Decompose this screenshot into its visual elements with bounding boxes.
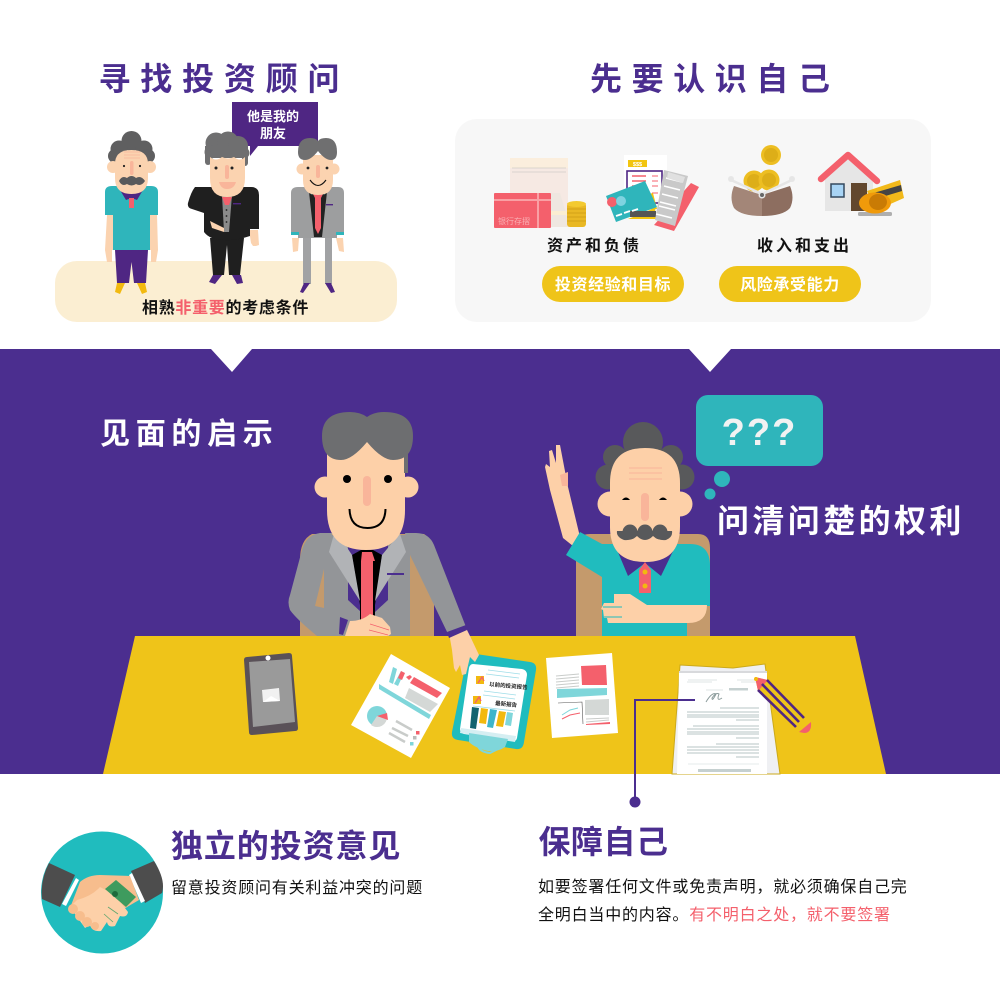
heading: find an adviser: 寻找投资顾问 <box>98 61 349 97</box>
hand on chest <box>339 617 348 635</box>
label: income and expenses: 收入和支出 <box>757 236 852 255</box>
hand on clipboard <box>447 625 479 675</box>
head <box>598 492 622 516</box>
purple meeting band <box>0 349 1000 774</box>
thought bubble with question marks: ??? <box>722 412 797 454</box>
character: adviser seated <box>288 412 466 640</box>
character: client raising hand <box>545 422 710 636</box>
pill: investment experience and goals: 投资经验和目标 <box>555 275 671 294</box>
clipboard with report: 最新报告 <box>495 699 518 709</box>
head <box>314 476 336 498</box>
icon: coin purse <box>728 145 795 216</box>
thought bubble with question marks <box>696 395 823 500</box>
shirt <box>602 544 710 636</box>
document: charts report <box>546 653 618 738</box>
label: assets and liabilities: 资产和负债 <box>547 236 642 255</box>
shirt, tie and lapels <box>348 545 388 612</box>
text: signing advice: 如要签署任何文件或免责声明，就必须确保自己完 <box>538 878 908 896</box>
chair <box>576 534 710 636</box>
speech bubble: he is my friend <box>232 102 318 156</box>
text: watch conflicts of interest: 留意投资顾问有关利益冲突的问题 <box>171 878 423 897</box>
icon: bills and credit card: $$$ <box>633 162 642 168</box>
clipboard with report <box>452 654 536 753</box>
arm across body <box>601 594 707 623</box>
speech bubble: he is my friend: 朋友 <box>260 126 286 141</box>
pencil <box>754 677 811 733</box>
panel: familiarity caption <box>55 261 397 322</box>
icon: bills and credit card <box>606 155 699 231</box>
heading: protect yourself: 保障自己 <box>538 824 669 860</box>
character: older man in teal shirt <box>105 131 158 294</box>
clipboard with report: 以前的投资报告 <box>489 680 528 691</box>
pill: risk tolerance: 风险承受能力 <box>740 275 840 294</box>
heading: independent advice: 独立的投资意见 <box>171 828 401 864</box>
table <box>103 636 886 774</box>
heading: lessons from the meeting: 见面的启示 <box>100 418 278 451</box>
icon: handshake with money <box>41 832 163 954</box>
callout line from contract to text <box>630 700 695 808</box>
character: man in grey suit <box>291 138 344 293</box>
icon: bank statement and passbook <box>494 158 586 228</box>
raised arm <box>545 445 580 546</box>
icon: smartphone on table <box>244 653 298 735</box>
heading: know yourself: 先要认识自己 <box>590 61 840 97</box>
hair <box>596 422 694 490</box>
chair <box>300 534 434 636</box>
pill: investment experience and goals <box>542 266 684 302</box>
character: man in black suit <box>188 132 259 284</box>
heading: ask clearly: 问清问楚的权利 <box>717 503 965 539</box>
icon: bank statement and passbook: 银行存摺 <box>498 216 530 226</box>
text: signing advice <box>538 878 908 924</box>
speech bubble: he is my friend: 他是我的 <box>247 109 299 124</box>
icon: house, car and credit card <box>821 155 904 216</box>
signed contract and pencil <box>672 664 811 774</box>
pill: risk tolerance <box>719 266 861 302</box>
document: pie chart report <box>351 654 450 758</box>
coin stack <box>567 203 586 227</box>
text: signing advice: 全明白当中的内容。有不明白之处，就不要签署 <box>538 906 891 924</box>
caption text: 相熟非重要的考虑条件 <box>142 298 309 317</box>
panel: know yourself checklist <box>455 119 931 322</box>
